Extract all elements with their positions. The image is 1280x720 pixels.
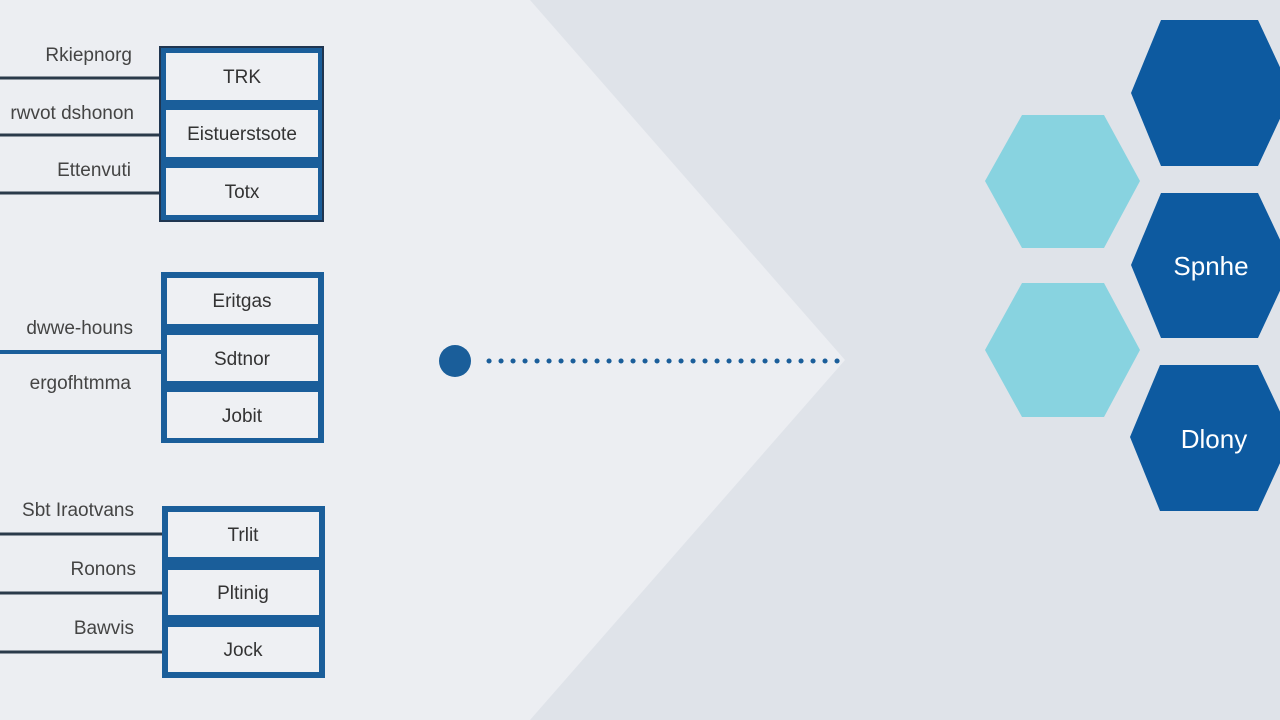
boxes: Sdtnor	[214, 349, 271, 370]
connector lines	[0, 78, 162, 193]
boxes: Eritgas	[212, 291, 272, 312]
boxes	[160, 47, 323, 221]
boxes: Totx	[225, 182, 260, 203]
labels	[26, 318, 133, 394]
hexagons	[985, 20, 1280, 511]
labels: Sbt Iraotvans	[22, 500, 134, 521]
labels	[10, 45, 134, 181]
boxes: Eistuerstsote	[187, 124, 297, 145]
labels: Ettenvuti	[57, 160, 131, 181]
hex dark 2: Spnhe	[1173, 251, 1249, 281]
labels: Rkiepnorg	[45, 45, 132, 66]
group 2	[0, 272, 324, 443]
labels: ergofhtmma	[30, 373, 131, 394]
hex dark 3: Dlony	[1181, 424, 1247, 454]
hex light 1	[985, 115, 1140, 248]
boxes	[162, 506, 325, 678]
labels: dwwe-houns	[26, 318, 133, 339]
dot connector	[439, 345, 846, 377]
hex dark 3	[1130, 365, 1280, 511]
hex dark 2	[1131, 193, 1280, 338]
boxes: Jobit	[222, 406, 263, 427]
boxes: Trlit	[228, 525, 259, 546]
boxes: Pltinig	[217, 583, 269, 604]
hex dark 1	[1131, 20, 1280, 166]
hex light 2	[985, 283, 1140, 417]
connector line	[0, 350, 163, 354]
boxes: Jock	[223, 640, 263, 661]
labels: Ronons	[70, 559, 136, 580]
labels: Bawvis	[74, 618, 134, 639]
connector lines	[0, 534, 164, 652]
boxes	[161, 272, 324, 443]
boxes: TRK	[223, 67, 261, 88]
labels: rwvot dshonon	[10, 103, 134, 124]
group 1	[0, 45, 323, 221]
group 3	[0, 500, 325, 678]
labels	[22, 500, 136, 639]
